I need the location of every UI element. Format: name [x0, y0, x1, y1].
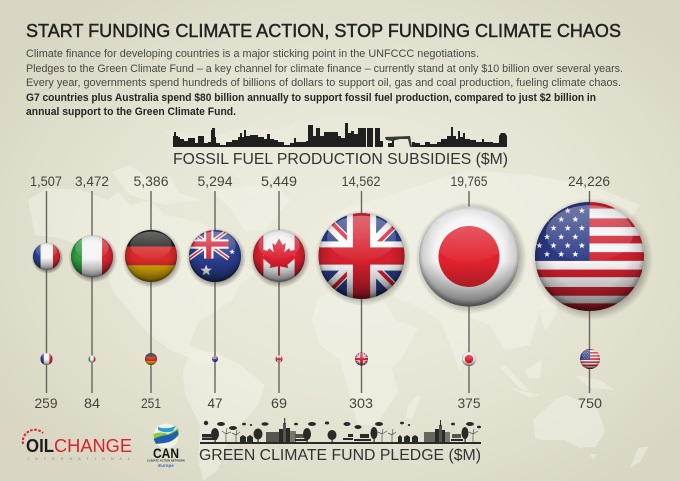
subsidy values: 5,294	[198, 174, 233, 189]
subsidy values: 5,449	[261, 174, 297, 189]
pledge values: 47	[208, 396, 222, 411]
logo: CAN Europe: CAN	[153, 446, 179, 461]
UK pledge sphere	[355, 352, 368, 366]
Germany subsidy sphere	[122, 228, 182, 288]
pledge values: 251	[141, 396, 161, 411]
pledge values	[34, 396, 602, 411]
title: START FUNDING CLIMATE ACTION, STOP FUNDING CLIMATE CHAOS	[26, 20, 621, 41]
intro text block: Every year, governments spend hundreds of billions of dollars to support oil, gas and coal production, fueling climate chaos.	[26, 77, 621, 89]
intro text block: annual support to the Green Climate Fund.	[26, 106, 236, 118]
Canada pledge sphere	[276, 356, 282, 362]
world map	[28, 120, 649, 481]
Italy subsidy sphere	[68, 234, 118, 283]
logo: Oil Change International	[23, 430, 132, 461]
logo: Oil Change International: CHANGE	[54, 436, 132, 456]
USA pledge sphere	[580, 349, 600, 369]
Australia pledge sphere	[212, 356, 218, 362]
France subsidy sphere	[32, 242, 64, 274]
connector lines	[46, 191, 590, 393]
fossil fuel industrial skyline	[173, 123, 507, 147]
subsidy values: 3,472	[75, 174, 109, 189]
logo: CAN Europe	[147, 424, 185, 468]
UK subsidy sphere	[315, 210, 411, 306]
subsidy values: 24,226	[568, 174, 610, 189]
Japan subsidy sphere	[415, 202, 527, 314]
pledge values: 750	[578, 396, 602, 411]
subsidy values: 14,562	[342, 174, 380, 189]
heading: fossil fuel production subsidies: FOSSIL FUEL PRODUCTION SUBSIDIES ($M)	[173, 151, 508, 168]
intro text block: Pledges to the Green Climate Fund – a key channel for climate finance – currently stand at only $10 billion over several years.	[26, 63, 623, 75]
USA subsidy sphere	[531, 198, 653, 320]
intro text block: Climate finance for developing countries is a major sticking point in the UNFCCC negotiations.	[26, 48, 479, 60]
France pledge sphere	[40, 353, 52, 365]
intro text block: G7 countries plus Australia spend $80 billion annually to support fossil fuel production, compared to just $2 billion in	[26, 92, 596, 104]
intro text block	[26, 48, 623, 118]
Japan pledge sphere	[462, 352, 476, 366]
subsidy values	[30, 174, 610, 189]
Italy pledge sphere	[88, 356, 96, 362]
Canada subsidy sphere	[250, 228, 310, 288]
Germany pledge sphere	[145, 353, 157, 365]
green city skyline	[200, 418, 481, 444]
heading: green climate fund pledge: GREEN CLIMATE FUND PLEDGE ($M)	[199, 447, 481, 464]
pledge values: 84	[84, 396, 101, 411]
logo: Oil Change International: OIL	[26, 436, 54, 456]
subsidy values: 5,386	[134, 174, 168, 189]
subsidy flag spheres	[32, 198, 653, 320]
logo: CAN Europe: Europe	[158, 463, 174, 468]
pledge values: 375	[458, 396, 480, 411]
pledge values: 259	[34, 396, 58, 411]
subsidy values: 1,507	[30, 174, 62, 189]
Australia subsidy sphere	[186, 228, 246, 288]
pledge values: 69	[271, 396, 287, 411]
pledge flag spheres	[40, 349, 600, 369]
subsidy values: 19,765	[450, 174, 488, 189]
logo: Oil Change International: I N T E R N A T I O N A L	[28, 456, 131, 461]
pledge values: 303	[349, 396, 373, 411]
logo: CAN Europe: CLIMATE ACTION NETWORK	[147, 458, 185, 462]
